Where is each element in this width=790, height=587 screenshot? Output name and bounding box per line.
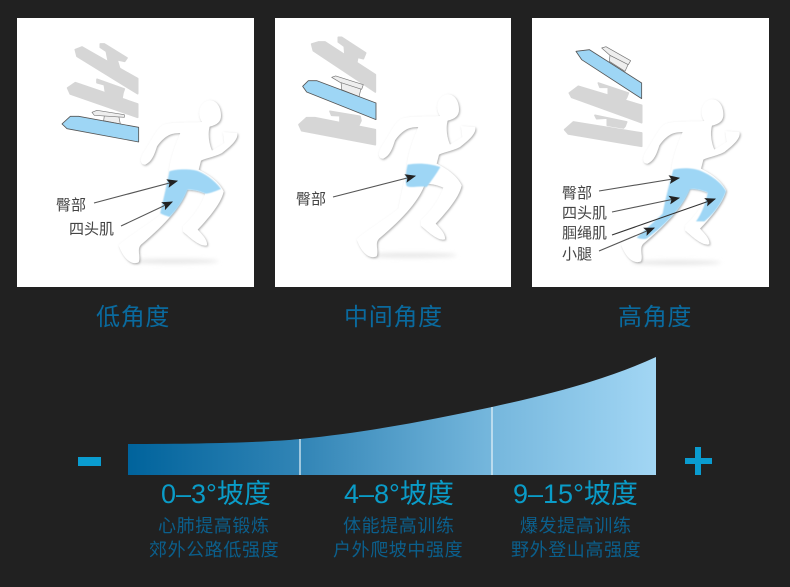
tier: 4-8 degrees <box>333 479 463 560</box>
tier: 0-3 degrees: 心肺提高锻炼 <box>158 516 270 536</box>
tier: 9-15 degrees: 爆发提高训练 <box>520 516 632 536</box>
icon: treadmill positions low angle <box>62 44 139 142</box>
tier: 9-15 degrees: 9–15°坡度 <box>513 479 638 509</box>
panel: low angle <box>17 18 254 287</box>
tier: 0-3 degrees <box>149 479 279 560</box>
callout: glutes: 臀部 <box>296 191 326 208</box>
callout: quadriceps <box>562 198 679 222</box>
tier: 4-8 degrees: 4–8°坡度 <box>344 479 454 509</box>
tier: 4-8 degrees: 户外爬坡中强度 <box>333 540 463 560</box>
icon: treadmill positions middle angle <box>299 37 376 145</box>
heading: low angle: 低角度 <box>96 304 170 331</box>
callout: glutes <box>562 178 679 202</box>
callout: glutes <box>296 176 415 208</box>
panel: high angle <box>532 18 769 287</box>
tier: 4-8 degrees: 体能提高训练 <box>343 516 455 536</box>
callout: quadriceps <box>69 202 172 238</box>
icon: minus <box>78 457 101 466</box>
callout: hamstrings <box>562 199 715 242</box>
callout: hamstrings: 腘绳肌 <box>562 225 607 242</box>
callout: calf: 小腿 <box>562 246 592 263</box>
chart: incline wedge <box>128 357 656 475</box>
tier: 9-15 degrees <box>511 479 641 560</box>
heading: middle angle: 中间角度 <box>344 304 443 331</box>
callout: calf <box>562 228 654 263</box>
icon: runner with glutes and quads highlighted <box>119 100 237 264</box>
callout: quadriceps: 四头肌 <box>562 205 607 222</box>
callout: quadriceps: 四头肌 <box>69 221 114 238</box>
tier: 9-15 degrees: 野外登山高强度 <box>511 540 641 560</box>
tier: 0-3 degrees: 郊外公路低强度 <box>149 540 279 560</box>
callout: glutes: 臀部 <box>56 197 86 214</box>
icon: treadmill positions high angle <box>565 47 642 146</box>
icon: plus <box>685 447 712 475</box>
tier: 0-3 degrees: 0–3°坡度 <box>161 479 271 509</box>
heading: high angle: 高角度 <box>618 304 692 331</box>
callout: glutes: 臀部 <box>562 185 592 202</box>
panel: middle angle <box>275 18 511 287</box>
icon: runner with glutes highlighted <box>357 94 475 258</box>
callout: glutes <box>56 181 177 214</box>
icon: runner with legs highlighted <box>621 99 740 265</box>
